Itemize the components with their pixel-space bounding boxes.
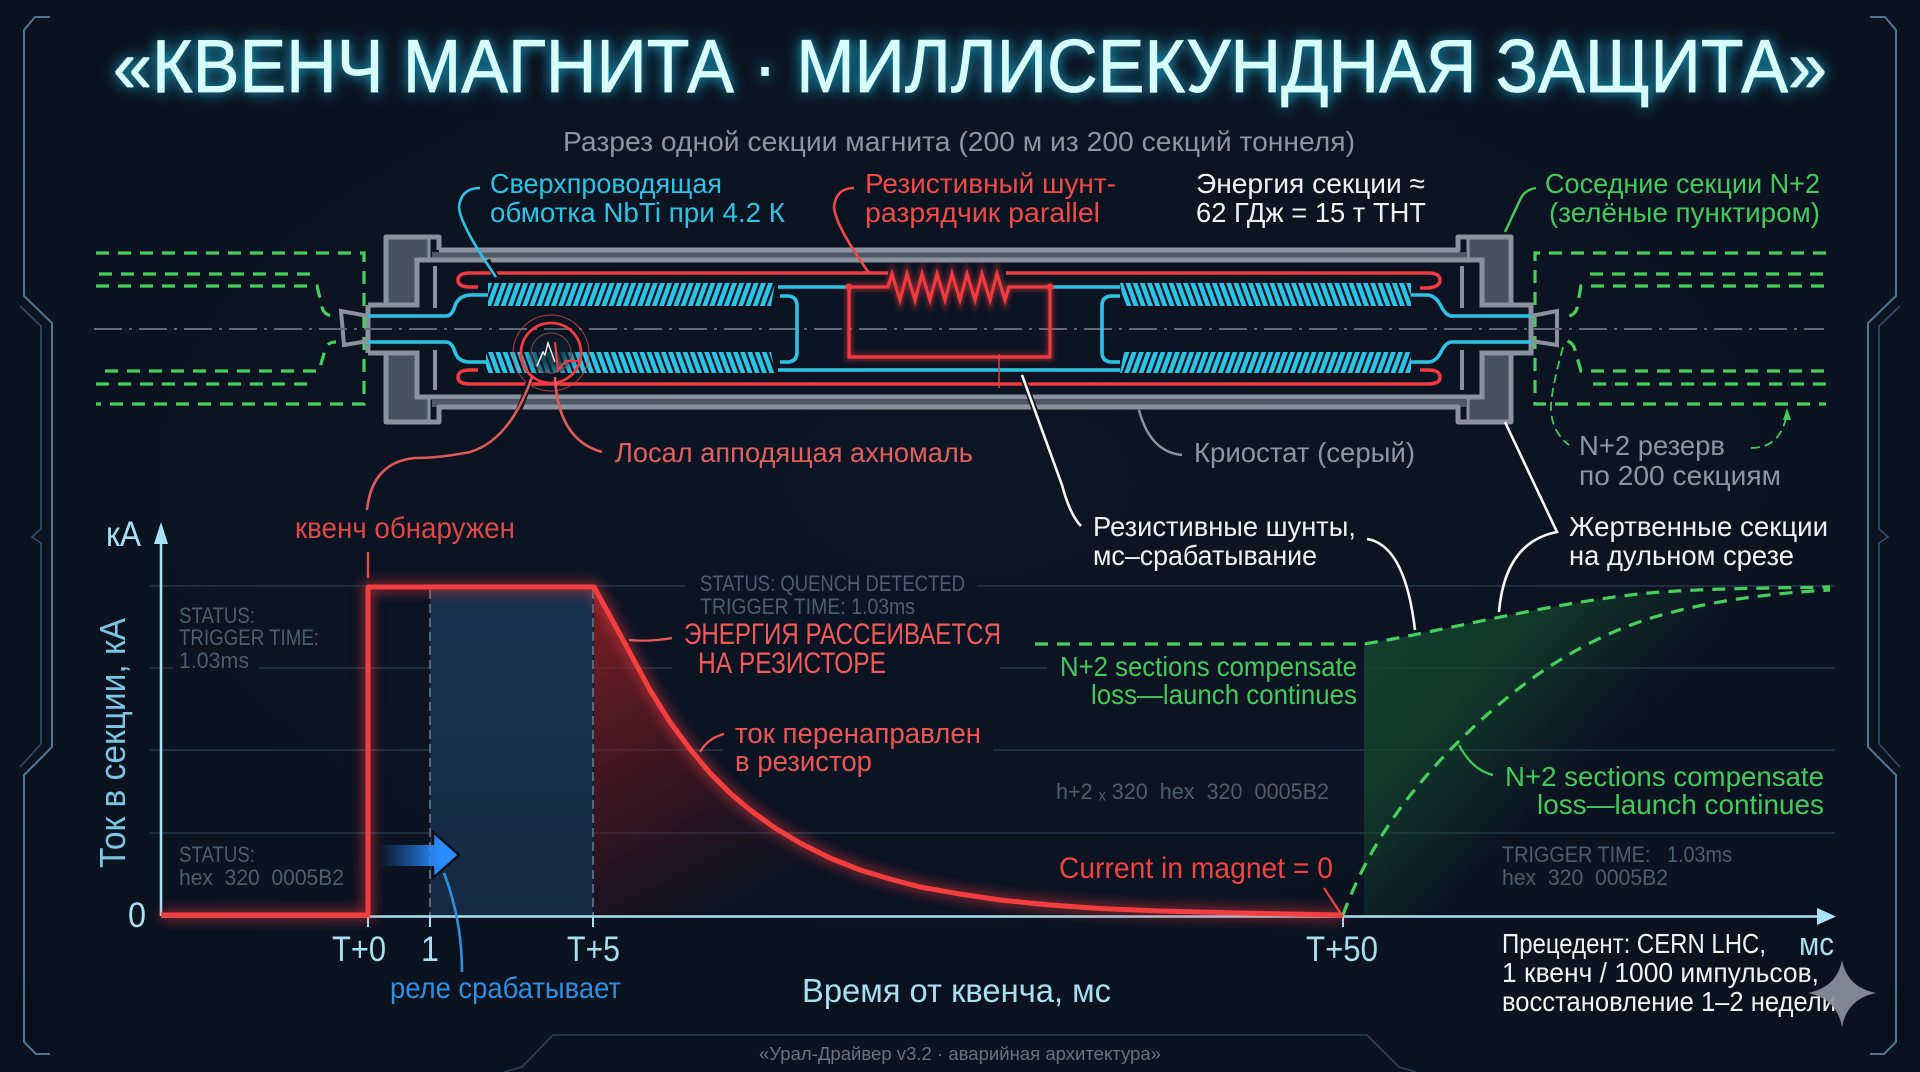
note: N+2 reserve: по 200 секциям: [1579, 460, 1781, 491]
label: relay fires: реле срабатывает: [390, 972, 621, 1005]
footer plate: «Урал-Драйвер v3.2 · аварийная архитектура»: [759, 1044, 1161, 1064]
status block lower left: STATUS:: [179, 842, 255, 867]
callout: resistive shunts: Резистивные шунты,: [1093, 511, 1356, 542]
energy note: 62 ГДж = 15 т ТНТ: [1196, 197, 1426, 228]
center line: [94, 328, 1824, 330]
resistor shunt: [849, 274, 1050, 388]
axes: [154, 522, 1836, 927]
footer plate: [504, 1035, 1416, 1072]
quench hot spot: [513, 315, 589, 391]
compensation curve upper: [1035, 587, 1830, 644]
label: energy dissipated: [629, 618, 1001, 680]
superconducting coils: [486, 283, 1411, 373]
band dashed edges: [430, 590, 593, 926]
callout: cryostat: [1139, 410, 1415, 468]
relay arrow: [379, 832, 459, 878]
magnet cross-section: [94, 237, 1824, 422]
callout: resistive shunt: Резистивный шунт-: [865, 168, 1116, 199]
callout: sacrificial sections: на дульном срезе: [1569, 540, 1794, 571]
current curve: [161, 587, 1343, 915]
neighbouring sections right: green dashed: [1535, 253, 1826, 404]
label: current in magnet zero: Current in magnet = 0: [1059, 852, 1333, 885]
status block top centre: [700, 571, 965, 619]
label: quench detected: квенч обнаружен: [295, 512, 515, 545]
callout: superconducting winding: обмотка NbTi при 4.2 К: [490, 197, 786, 228]
callout: resistive shunts: мс–срабатывание: [1093, 540, 1317, 571]
chart: section current vs time: [92, 377, 1836, 1009]
resistor glow: [849, 274, 1050, 357]
label: compensate lower: N+2 sections compensate: [1505, 761, 1824, 792]
label: current redirected: в резистор: [735, 746, 872, 778]
label: relay fires: [390, 873, 621, 1005]
callout: resistive shunt: разрядчик parallel: [865, 197, 1100, 228]
callout: local anomaly: Лосал апподящая ахномаль: [615, 437, 973, 468]
status block right: [1502, 842, 1732, 890]
label: current in magnet zero: [1059, 852, 1341, 914]
callout: resistive shunt: [834, 168, 1116, 273]
callout: neighbouring sections: [1505, 168, 1820, 232]
note: N+2 reserve: [1551, 347, 1791, 491]
callout: local anomaly: [555, 377, 973, 468]
callout: superconducting winding: [459, 168, 786, 277]
x axis labels: T+0: [332, 930, 386, 969]
callout: neighbouring sections: Соседние секции N+2: [1545, 168, 1820, 199]
label: energy dissipated: ЭНЕРГИЯ РАССЕИВАЕТСЯ: [684, 618, 1001, 651]
energy note: Энергия секции ≈: [1196, 168, 1425, 199]
label: compensate lower: loss—launch continues: [1537, 789, 1824, 820]
status block lower left: hex 320 0005B2: [179, 865, 344, 890]
current curve glow: [161, 587, 1343, 915]
energy note: [1196, 168, 1426, 228]
label: compensate upper: N+2 sections compensate: [1060, 651, 1357, 682]
icon: sparkle: [1808, 960, 1876, 1027]
status hex centre: h+2 ₓ 320 hex 320 0005B2: [1056, 779, 1329, 804]
y axis labels: 0: [128, 896, 146, 935]
label: compensate lower: [1459, 745, 1824, 820]
callout: sacrificial sections: Жертвенные секции: [1569, 511, 1828, 542]
precedent note: Прецедент: CERN LHC,: [1502, 928, 1766, 959]
y axis labels: кА: [106, 515, 142, 554]
x axis labels: [332, 926, 1834, 1009]
status block lower left: [179, 842, 344, 890]
cyan wires: [368, 287, 1531, 370]
status block right: hex 320 0005B2: [1502, 865, 1668, 890]
label: energy dissipated: НА РЕЗИСТОРЕ: [698, 647, 886, 680]
label: current redirected: [700, 718, 981, 778]
callout: superconducting winding: Сверхпроводящая: [490, 168, 722, 199]
status block top centre: STATUS: QUENCH DETECTED: [700, 571, 965, 596]
shunt junction dots: [846, 284, 1054, 290]
precedent note: восстановление 1–2 недели: [1502, 986, 1836, 1017]
energy dissipated area: [594, 590, 890, 916]
status block upper left: [179, 603, 319, 673]
precedent note: [1502, 928, 1836, 1017]
callout: neighbouring sections: (зелёные пунктиром): [1549, 197, 1820, 228]
note: N+2 reserve: N+2 резерв: [1579, 430, 1725, 461]
y axis labels: [92, 515, 146, 935]
x axis labels: 1: [421, 930, 439, 969]
grid lines: [150, 586, 1835, 833]
x axis labels: Время от квенча, мс: [802, 972, 1111, 1009]
neighbouring sections left: green dashed: [96, 253, 364, 404]
left frame: [20, 17, 52, 1054]
red shunt outer lines: [458, 273, 1440, 384]
x axis labels: мс: [1799, 926, 1834, 962]
callout: cryostat: Криостат (серый): [1194, 437, 1415, 468]
callout: resistive shunts: [1022, 375, 1415, 630]
status block right: TRIGGER TIME: 1.03ms: [1502, 842, 1732, 867]
relay delay band: [430, 590, 593, 916]
label: current redirected: ток перенаправлен: [735, 718, 981, 750]
x axis labels: T+50: [1306, 930, 1378, 969]
status block upper left: 1.03ms: [179, 648, 249, 673]
label: compensate upper: loss—launch continues: [1091, 679, 1357, 710]
label: quench detected: [295, 377, 532, 578]
cryostat wall: [341, 237, 1557, 422]
label: compensate upper: [1060, 651, 1357, 710]
precedent note: 1 квенч / 1000 импульсов,: [1502, 957, 1819, 988]
y axis labels: Ток в секции, кА: [92, 618, 133, 868]
compensation curve lower: [1343, 590, 1830, 915]
recovery area: [1364, 587, 1830, 916]
x axis labels: T+5: [567, 930, 620, 969]
status block top centre: TRIGGER TIME: 1.03ms: [700, 594, 915, 619]
title: «КВЕНЧ МАГНИТА · МИЛЛИСЕКУНДНАЯ ЗАЩИТА»: [113, 24, 1827, 108]
right frame: [1868, 17, 1900, 1054]
status block upper left: TRIGGER TIME:: [179, 625, 319, 650]
subtitle: Разрез одной секции магнита (200 м из 200 секций тоннеля): [563, 126, 1355, 157]
status block upper left: STATUS:: [179, 603, 255, 628]
callout: sacrificial sections: [1499, 422, 1828, 612]
